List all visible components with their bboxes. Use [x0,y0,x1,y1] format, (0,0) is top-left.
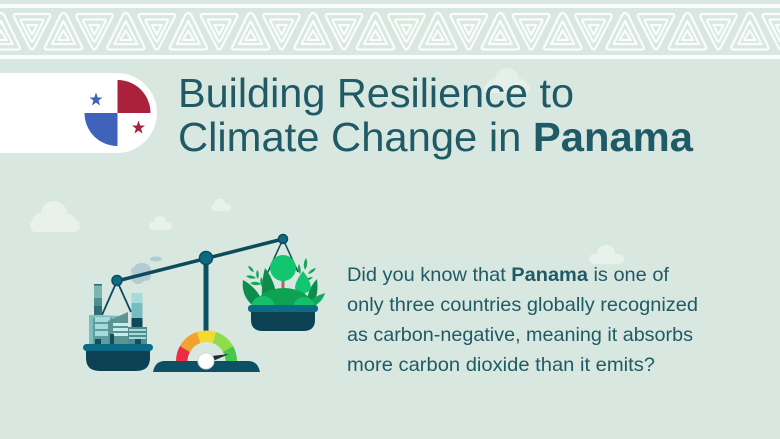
body text: only three countries globally recognized [347,294,698,316]
cloud: above text [589,245,624,264]
hills [255,288,313,326]
body text [347,264,698,376]
cloud behind title [484,68,530,93]
cloud: large left [30,201,80,232]
title [178,70,694,160]
beam and post [204,258,208,340]
cloud: small top [211,198,231,211]
cloud: small middle [149,216,172,230]
body text: more carbon dioxide than it emits? [347,354,655,376]
left pan with factory [83,281,153,371]
trees [282,278,284,292]
ferns [246,258,316,287]
title: Building Resilience to [178,70,574,116]
decorative top band [0,4,780,59]
smoke [131,256,162,284]
gauge [153,330,260,372]
illustration: balance scale [83,234,325,372]
icon: Panama flag [84,80,150,146]
title: Climate Change in Panama [178,114,694,160]
right pan with plants [243,239,325,331]
body text: Did you know that Panama is one of [347,264,670,286]
leaves [243,268,325,307]
flag badge [0,73,157,153]
body text: as carbon-negative, meaning it absorbs [347,324,693,346]
